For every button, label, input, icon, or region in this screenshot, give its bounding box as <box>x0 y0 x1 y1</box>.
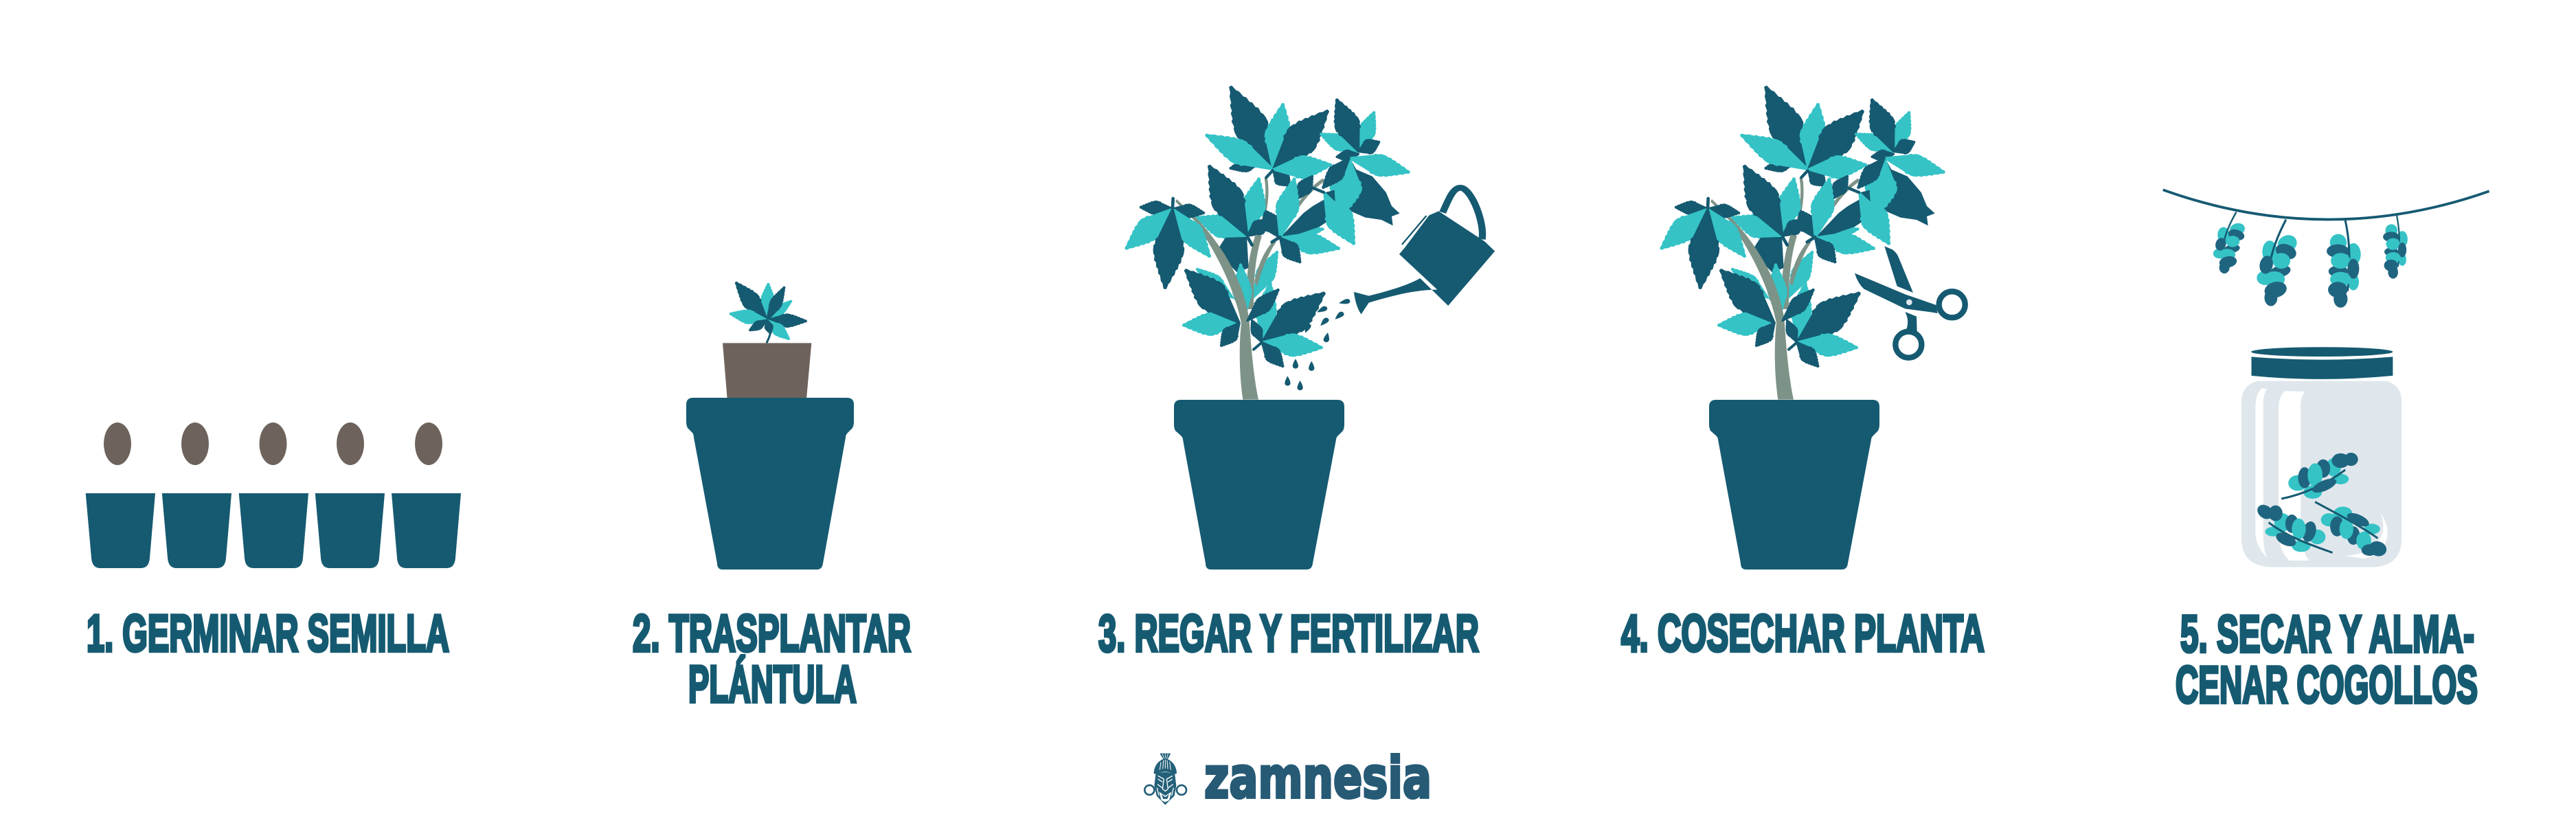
logo: Zamnesia <box>1144 745 1432 811</box>
panel: step 5 dry and store buds <box>2163 190 2489 714</box>
icon: five small pots <box>86 493 461 568</box>
panel: step 2 transplant seedling <box>633 278 911 714</box>
icon: drying line with buds <box>2163 190 2489 308</box>
icon: tribal mask <box>1144 754 1186 805</box>
icon: large pot <box>686 398 854 570</box>
icon: watering can with drops <box>1285 188 1495 390</box>
panel: step 4 harvest plant <box>1621 80 1985 663</box>
heading: step 4: 4. COSECHAR PLANTA <box>1621 605 1985 663</box>
icon: pot <box>1709 400 1879 570</box>
panel: step 3 water and fertilize <box>1098 80 1495 663</box>
icon: seedling in small pot <box>723 278 811 399</box>
icon: jar with buds <box>2241 347 2402 567</box>
panel: step 1 germinate seeds <box>86 422 461 663</box>
wordmark: zamnesia <box>1204 745 1432 811</box>
icon: plant <box>1119 80 1411 400</box>
panel: step 2 transplant seedling: PLÁNTULA <box>688 655 857 714</box>
heading: step 1: 1. GERMINAR SEMILLA <box>87 605 449 663</box>
icon: plant <box>1654 80 1946 400</box>
icon: pot <box>1174 400 1344 570</box>
heading: step 2: 2. TRASPLANTAR <box>633 605 911 663</box>
icon: seeds <box>104 422 442 465</box>
heading: step 3: 3. REGAR Y FERTILIZAR <box>1098 605 1479 663</box>
icon: scissors <box>1855 246 1965 358</box>
